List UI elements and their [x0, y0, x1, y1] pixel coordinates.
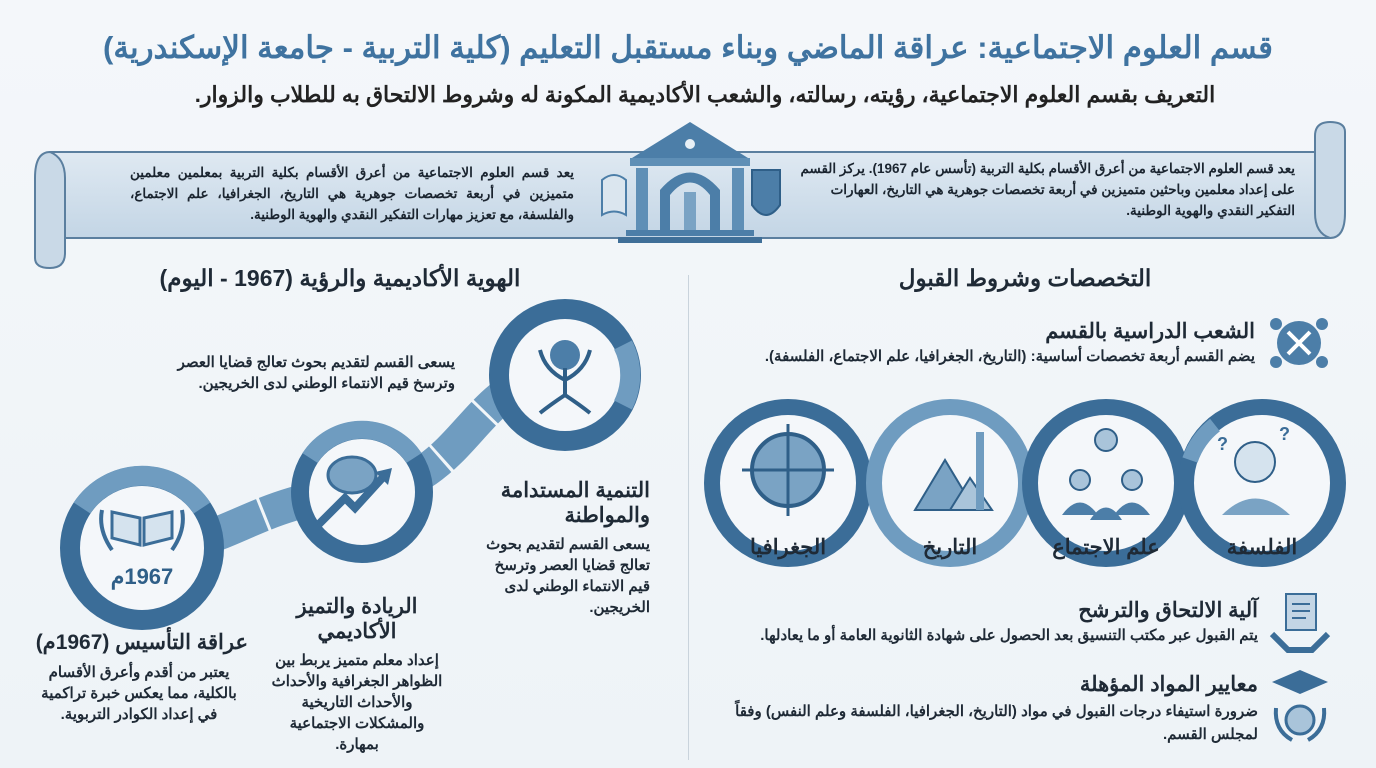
- criteria heading + text: ضرورة استيفاء درجات القبول في مواد (التاريخ، الجغرافيا، الفلسفة وعلم النفس) وفقاً لمجلس القسم.: [735, 703, 1258, 743]
- scroll banner: [34, 121, 1346, 269]
- branches heading + text: [765, 320, 1255, 365]
- step 1 text: يعتبر من أقدم وأعرق الأقسام بالكلية، مما يعكس خبرة تراكمية في إعداد الكوادر التربوية.: [41, 664, 237, 723]
- step 2 text: [272, 595, 442, 753]
- circle labels: التاريخ: [923, 536, 977, 559]
- divider: [688, 275, 689, 760]
- people: [1095, 429, 1117, 451]
- timeline chart: [60, 299, 641, 630]
- icon: building with logos: [601, 122, 781, 243]
- step 1 text: عراقة التأسيس (1967م): [36, 631, 248, 654]
- branches heading + text: يضم القسم أربعة تخصصات أساسية: (التاريخ، الجغرافيا، علم الاجتماع، الفلسفة).: [765, 348, 1255, 365]
- four specialization circles: ?: [1279, 424, 1290, 444]
- icon: graduation badge: [1272, 670, 1328, 742]
- step 3 text: يسعى القسم لتقديم بحوث تعالج قضايا العصر وترسخ قيم الانتماء الوطني لدى الخريجين.: [486, 536, 650, 616]
- subtitle: التعريف بقسم العلوم الاجتماعية، رؤيته، رسالته، والشعب الأكاديمية المكونة له وشروط الالتحاق به للطلاب والزوار.: [195, 82, 1215, 107]
- timeline chart: 1967م: [111, 564, 173, 590]
- scroll text: right: يعد قسم العلوم الاجتماعية من أعرق الأقسام بكلية التربية (تأسس عام 1967). يركز القسم على إعداد معلمين وباحثين متميزين في أربعة تخصصات جوهرية هي التاريخ، العهارات التفكير النقدي والهوية الوطنية.: [800, 161, 1295, 218]
- step 3 text: [486, 479, 650, 616]
- circle labels: الجغرافيا: [750, 536, 826, 559]
- criteria heading + text: معايير المواد المؤهلة: [1080, 673, 1258, 696]
- step 1 text: [36, 627, 248, 724]
- four specialization circles: [704, 399, 1346, 567]
- step 2 text: الريادة والتميز الأكاديمي: [296, 595, 418, 643]
- circle labels: الفلسفة: [1227, 536, 1297, 559]
- title: قسم العلوم الاجتماعية: عراقة الماضي وبناء مستقبل التعليم (كلية التربية - جامعة الإسكندرية): [103, 30, 1273, 65]
- tree icon: [550, 340, 580, 370]
- admission heading + text: [760, 596, 1260, 644]
- admission heading + text: آلية الالتحاق والترشح: [1078, 599, 1258, 622]
- heading: specializations: التخصصات وشروط القبول: [899, 265, 1151, 291]
- branches heading + text: الشعب الدراسية بالقسم: [1045, 320, 1255, 343]
- admission heading + text: يتم القبول عبر مكتب التنسيق بعد الحصول على شهادة الثانوية العامة أو ما يعادلها.: [760, 627, 1258, 644]
- step 2 text: إعداد معلم متميز يربط بين الظواهر الجغرافية والأحداث والأحداث التاريخية والمشكلات الاجتماعية بمهارة.: [272, 652, 442, 753]
- criteria heading + text: [734, 673, 1258, 743]
- icon: branches network: [1270, 318, 1328, 368]
- scroll text: left: يعد قسم العلوم الاجتماعية من أعرق الأقسام بكلية التربية بمعلمين معلمين متميزين في أربعة تخصصات جوهرية هي التاريخ، الجغرافيا، علم الاجتماع، والفلسفة، مع تعزيز مهارات التفكير النقدي والهوية الوطنية.: [130, 165, 574, 222]
- icon: handshake document: [1270, 593, 1330, 653]
- brain icon: [328, 457, 376, 493]
- circle labels: [750, 536, 1297, 560]
- text: top callout: يسعى القسم لتقديم بحوث تعالج قضايا العصر وترسخ قيم الانتماء الوطني لدى الخريجين.: [178, 354, 455, 392]
- circle labels: علم الاجتماع: [1052, 536, 1160, 559]
- book icon: [112, 512, 172, 545]
- globe: [752, 434, 824, 506]
- step 3 text: التنمية المستدامة والمواطنة: [501, 479, 650, 527]
- pyramids: [915, 460, 975, 510]
- four specialization circles: ?: [1217, 434, 1228, 454]
- philosopher: [1235, 442, 1275, 482]
- heading: academic identity: الهوية الأكاديمية والرؤية (1967 - اليوم): [160, 265, 520, 291]
